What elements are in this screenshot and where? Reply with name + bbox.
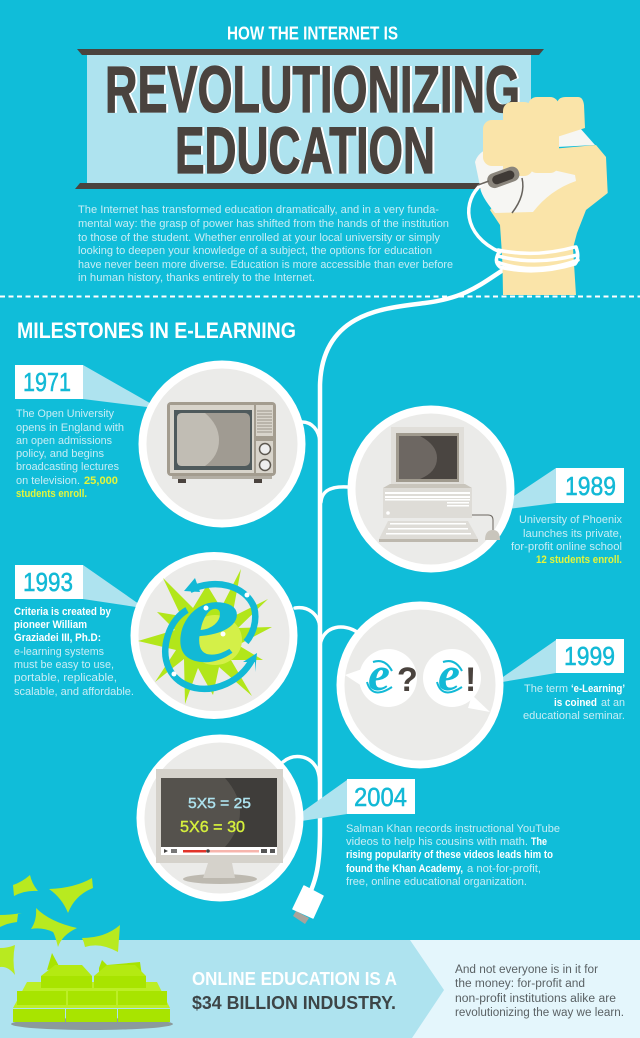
intro paragraph: have never been more diverse. Education is more accessible than ever before [78,259,453,271]
intro paragraph: mental way: the grasp of power has shifted from the hands of the institution [78,218,449,230]
milestone 1993 [14,551,294,715]
text 1989: 12 students enroll. [536,554,622,566]
industry headline: ONLINE EDUCATION IS A [192,968,397,989]
closing text: the money: for-profit and [455,978,585,990]
text 1993: scalable, and affordable. [14,686,134,698]
chalk equation 1: 5X5 = 25 [188,795,251,812]
callout beam 1999 [490,640,556,684]
flying money [0,875,120,975]
icon: desktop computer [379,427,500,542]
text 1993: e-learning systems [14,646,104,658]
year label 1971: 1971 [23,367,71,397]
callout beam 2004 [282,780,347,824]
main cable timeline [283,270,503,895]
text 1999: educational seminar. [523,710,625,722]
text 1999: ‘e-Learning’ [571,683,625,695]
closing text: And not everyone is in it for [455,964,598,976]
callout beam 1989 [500,468,556,510]
speech bubble: question: e [368,648,390,701]
speech bubble: exclamation [423,648,490,712]
fingers [483,97,585,176]
text 1993: portable, replicable, [14,672,117,684]
cable connector [293,886,323,924]
icon: e-learning starburst logo [138,551,272,704]
circle 1999 [340,606,500,764]
callout beam 1971 [83,365,160,409]
milestone 1989 [352,410,624,568]
year label 1989: 1989 [565,471,616,501]
circle 1993 [134,556,294,715]
title line: education: EDUCATION [175,113,435,187]
text 1971: on television. [16,475,80,487]
speech bubble: exclamation: e [438,648,460,701]
title banner [75,49,544,189]
cord wrapped around wrist [469,184,578,271]
speech bubble: question: ? [397,661,418,699]
text 2004: free, online educational organization. [346,876,527,888]
text 1993: Graziadei III, Ph.D: [14,632,101,644]
mouse scroll wheel [485,165,521,190]
icon: e-learning starburst logo: e [177,551,240,689]
text 1999 [523,683,625,722]
footer band [0,940,640,1038]
year label 1999: 1999 [564,641,615,671]
text 1989: for-profit online school [511,541,622,553]
text 1989: launches its private, [523,528,622,540]
speech bubble: question [345,648,418,707]
speech bubble: exclamation: ! [465,661,476,699]
text 1993: pioneer William [14,619,87,631]
money bricks [11,953,173,1030]
text 1971: opens in England with [16,422,124,434]
circle 1971 [142,364,302,524]
text 2004: Salman Khan records instructional YouTube [346,823,560,835]
text 1999: The term [524,683,568,695]
industry headline: $34 BILLION INDUSTRY. [192,992,396,1013]
text 1971 [16,408,124,500]
hand gripping mouse [469,97,608,295]
intro paragraph [78,204,453,284]
closing text: non-profit institutions alike are [455,993,616,1005]
text 1971: students enroll. [16,488,87,500]
text 1993: must be easy to use, [14,659,114,671]
icon: monitor with video lesson [156,769,283,884]
text 2004: found the Khan Academy, [346,863,463,875]
intro paragraph: looking to deepen your knowledge of a subject, the options for education [78,245,432,257]
intro paragraph: in human history, thanks entirely to the Internet. [78,272,315,284]
chalk equation 2: 5X6 = 30 [180,819,245,836]
circle 2004 [140,738,300,898]
text 2004: rising popularity of these videos leads him to [346,849,553,861]
year label 2004: 2004 [354,782,407,812]
milestone 2004 [140,738,560,898]
icon: television [167,402,276,483]
milestone 1999 [340,606,625,764]
text 1999: at an [601,697,625,709]
text 1989: University of Phoenix [519,514,622,526]
palm [490,145,608,295]
intro paragraph: to those of the student. Whether enrolled at your local university or simply [78,232,440,244]
text 1971: policy, and begins [16,448,104,460]
text 1999: is coined [554,697,597,709]
text 1993 [14,606,134,698]
industry headline [192,968,397,1013]
title kicker: HOW THE INTERNET IS [227,24,398,44]
text 1989 [511,514,622,566]
intro paragraph: The Internet has transformed education dramatically, and in a very funda- [78,204,439,216]
text 1971: The Open University [16,408,114,420]
section heading: MILESTONES IN E-LEARNING [17,318,296,343]
text 2004: a not-for-profit, [467,863,541,875]
milestone 1971 [15,364,302,524]
text 2004: videos to help his cousins with math. [346,836,528,848]
mouse body [475,128,595,213]
closing text: revolutionizing the way we learn. [455,1007,624,1019]
circle 1989 [352,410,510,568]
text 1993: Criteria is created by [14,606,112,618]
year label 1993: 1993 [23,567,73,597]
text 2004: The [531,836,547,848]
text 1971: 25,000 [84,475,118,487]
text 1971: an open admissions [16,435,112,447]
callout beam 1993 [83,565,150,610]
text 1971: broadcasting lectures [16,461,119,473]
text 2004 [346,823,560,888]
closing text [455,964,624,1019]
